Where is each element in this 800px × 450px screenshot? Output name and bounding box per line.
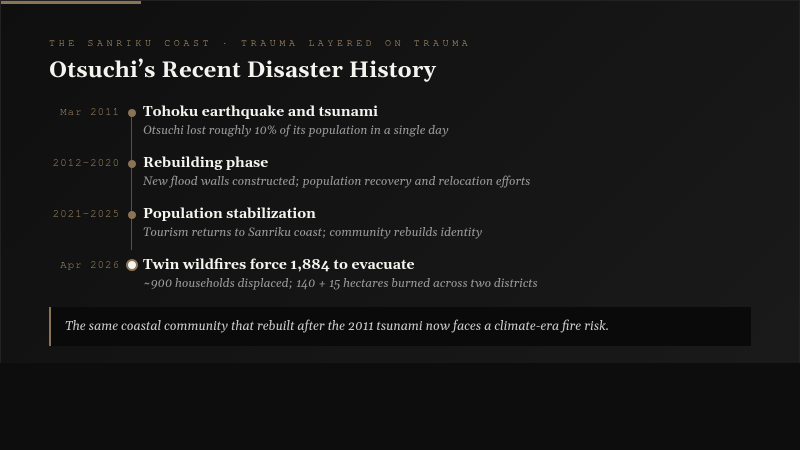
timeline axis line xyxy=(131,113,132,250)
event: Mar 2011: Otsuchi lost roughly 10% of its population in a single day xyxy=(143,124,449,139)
event: 2021-2025 xyxy=(53,205,482,241)
progress bar xyxy=(1,1,141,4)
event: Apr 2026: Twin wildfires force 1,884 to evacuate xyxy=(143,256,415,274)
event: 2012-2020: New flood walls constructed; population recovery and relocation efforts xyxy=(143,175,530,190)
eyebrow label: THE SANRIKU COAST · TRAUMA LAYERED ON TRAUMA xyxy=(49,38,471,48)
event: Apr 2026: ~900 households displaced; 140 + 15 hectares burned across two districts xyxy=(143,277,538,292)
title: Otsuchi’s Recent Disaster History xyxy=(49,57,436,85)
event: Mar 2011 xyxy=(60,103,449,139)
event: 2021-2025: 2021–2025 xyxy=(53,209,120,220)
event: 2021-2025: Population stabilization xyxy=(143,205,316,223)
event: Mar 2011: Tohoku earthquake and tsunami xyxy=(143,103,378,121)
event: Apr 2026 xyxy=(60,256,538,292)
callout xyxy=(49,307,751,346)
event: 2012-2020 xyxy=(53,154,530,190)
event: 2012-2020: Rebuilding phase xyxy=(143,154,268,172)
event: Apr 2026: Apr 2026 xyxy=(60,260,120,271)
event: 2021-2025: Tourism returns to Sanriku coast; community rebuilds identity xyxy=(143,226,482,241)
event: 2012-2020: 2012–2020 xyxy=(53,158,120,169)
callout: The same coastal community that rebuilt after the 2011 tsunami now faces a climate-era fire risk. xyxy=(65,319,609,335)
event: Mar 2011: Mar 2011 xyxy=(60,107,120,118)
timeline xyxy=(53,103,538,292)
